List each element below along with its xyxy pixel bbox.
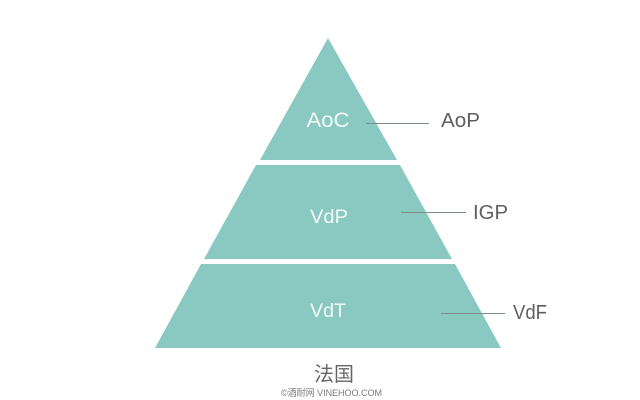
label: AoP: AoP xyxy=(441,110,480,132)
tier: VdP xyxy=(204,165,452,259)
caption: France: 法国 xyxy=(314,363,354,386)
label: VdT: VdT xyxy=(310,301,346,322)
connector: VdP to IGP xyxy=(401,212,466,214)
watermark: ©酒耐网 VINEHOO.COM xyxy=(281,387,382,399)
label: AoC: AoC xyxy=(306,109,350,132)
label: IGP: IGP xyxy=(473,202,508,224)
label: VdP: VdP xyxy=(310,207,348,228)
tier: VdT xyxy=(155,264,501,348)
connector: AoC to AoP xyxy=(366,122,429,124)
label: VdF: VdF xyxy=(513,302,547,324)
connector: VdT to VdF xyxy=(441,312,505,314)
pyramid xyxy=(155,38,501,348)
tier: AoC xyxy=(260,38,397,160)
